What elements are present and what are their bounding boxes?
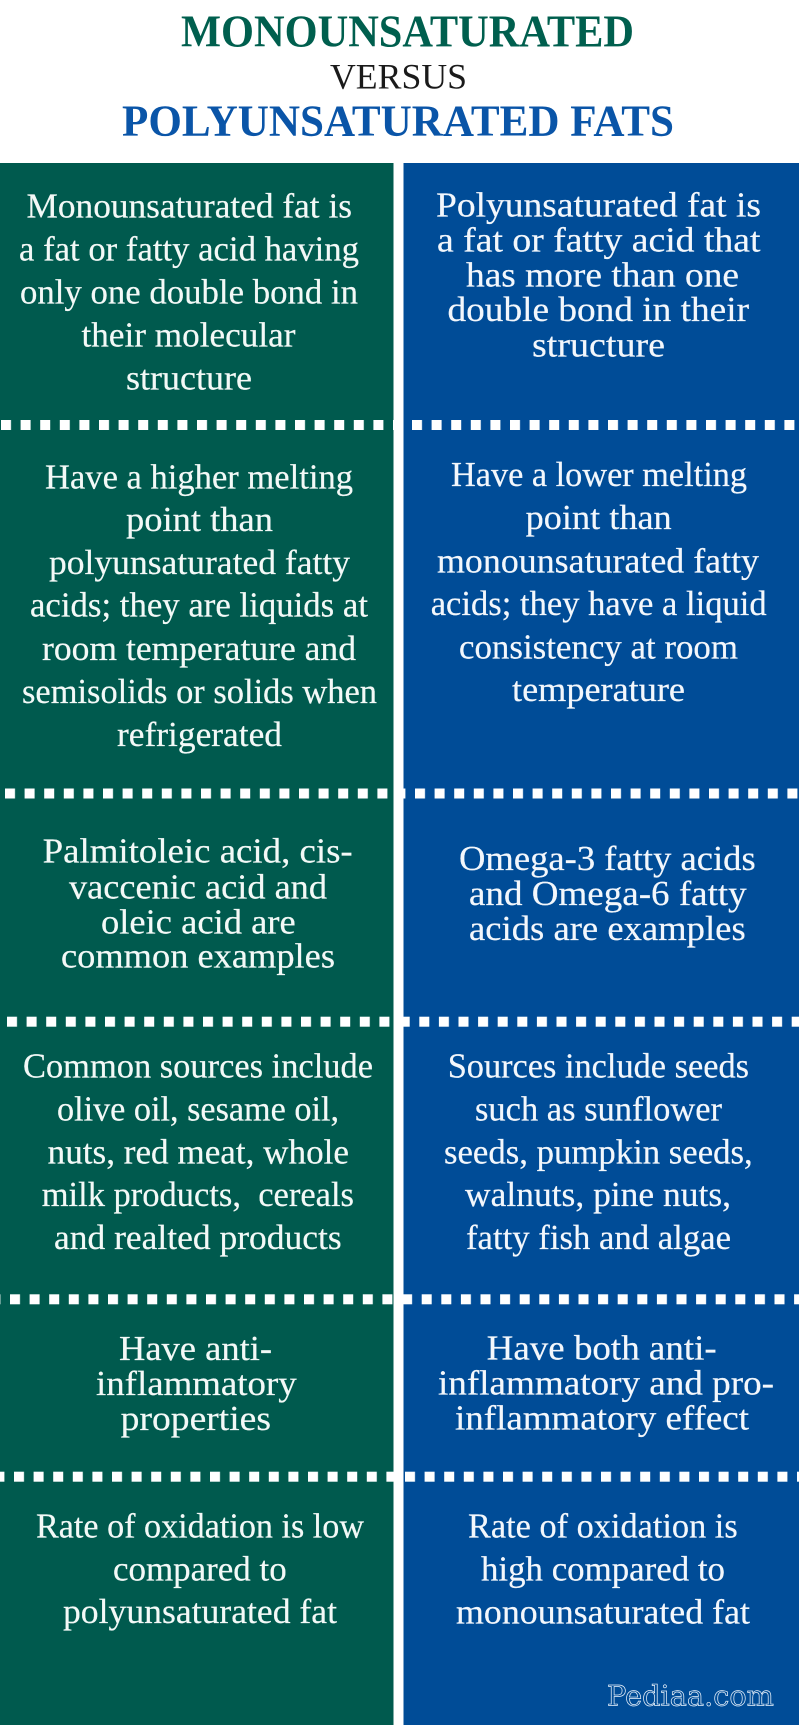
text: melting point: point than [526, 498, 672, 537]
title line: versus: VERSUS [330, 56, 467, 96]
text: melting point: semisolids or solids when [22, 672, 377, 711]
text: oxidation rate [456, 1507, 750, 1631]
text: examples: and Omega-6 fatty [469, 874, 747, 913]
text: definition: only one double bond in [20, 272, 358, 311]
title line: polyunsaturated fats: POLYUNSATURATED FATS [122, 97, 674, 146]
text: definition: double bond in their [448, 290, 749, 329]
text: inflammatory effect [438, 1328, 774, 1437]
text: examples: vaccenic acid and [69, 867, 328, 906]
text: examples: acids are examples [469, 909, 746, 948]
text: melting point: Have a lower melting [451, 455, 747, 494]
text: definition: their molecular [82, 316, 296, 355]
text: definition [19, 187, 359, 397]
text: inflammatory effect: inflammatory and pro- [438, 1363, 774, 1402]
text: inflammatory effect: inflammatory effect [455, 1398, 749, 1437]
text: examples: oleic acid are [101, 902, 296, 941]
text: melting point: consistency at room [459, 627, 738, 666]
panel: monounsaturated column [0, 163, 394, 1725]
text: sources: olive oil, sesame oil, [57, 1090, 339, 1129]
text: oxidation rate: high compared to [481, 1550, 725, 1589]
text: inflammatory properties: inflammatory [96, 1364, 297, 1403]
text: definition: Polyunsaturated fat is [436, 186, 761, 225]
text: inflammatory properties [96, 1329, 297, 1438]
text: sources: such as sunflower [475, 1090, 722, 1129]
text: definition: a fat or fatty acid having [19, 230, 359, 269]
text: inflammatory properties: Have anti- [119, 1329, 272, 1368]
text: melting point: acids; they are liquids at [30, 586, 368, 625]
text: melting point: point than [126, 500, 273, 539]
text: definition: has more than one [466, 256, 739, 295]
text: melting point: Have a higher melting [45, 457, 353, 496]
panel: polyunsaturated column [404, 163, 799, 1725]
text: examples [43, 832, 353, 976]
text: sources [23, 1046, 373, 1257]
text: examples: Omega-3 fatty acids [459, 839, 756, 878]
text: definition: Monounsaturated fat is [26, 187, 352, 226]
text: sources: seeds, pumpkin seeds, [444, 1132, 753, 1171]
text: inflammatory properties: properties [121, 1399, 271, 1438]
text: sources: walnuts, pine nuts, [465, 1175, 731, 1214]
text: sources [444, 1046, 753, 1257]
watermark: Pediaa.com: Pediaa.com [607, 1680, 774, 1712]
text: definition: structure [532, 326, 665, 365]
text: melting point: polyunsaturated fatty [49, 543, 350, 582]
text: oxidation rate: polyunsaturated fat [63, 1592, 337, 1631]
text: melting point: acids; they have a liquid [431, 584, 767, 623]
title [122, 7, 674, 146]
text: definition [436, 186, 761, 365]
text: definition: a fat or fatty acid that [437, 221, 761, 260]
text: oxidation rate: Rate of oxidation is low [36, 1507, 365, 1546]
text: sources: Sources include seeds [448, 1046, 749, 1085]
text: examples [459, 839, 756, 948]
text: inflammatory effect: Have both anti- [487, 1328, 717, 1367]
text: melting point: monounsaturated fatty [437, 541, 759, 580]
text: sources: Common sources include [23, 1046, 373, 1085]
text: melting point: temperature [512, 670, 685, 709]
text: melting point: refrigerated [117, 715, 282, 754]
text: sources: milk products, cereals [42, 1175, 354, 1214]
text: oxidation rate: Rate of oxidation is [468, 1507, 738, 1546]
text: oxidation rate: monounsaturated fat [456, 1592, 750, 1631]
text: examples: common examples [61, 937, 335, 976]
text: sources: fatty fish and algae [466, 1218, 731, 1257]
text: melting point [431, 455, 767, 709]
text: oxidation rate: compared to [113, 1550, 287, 1589]
title line: monounsaturated: MONOUNSATURATED [181, 7, 634, 57]
text: oxidation rate [36, 1507, 365, 1631]
text: sources: nuts, red meat, whole [48, 1132, 349, 1171]
text: melting point: room temperature and [42, 629, 356, 668]
text: melting point [22, 457, 377, 754]
text: definition: structure [126, 358, 252, 397]
text: sources: and realted products [54, 1218, 342, 1257]
text: examples: Palmitoleic acid, cis- [43, 832, 353, 871]
